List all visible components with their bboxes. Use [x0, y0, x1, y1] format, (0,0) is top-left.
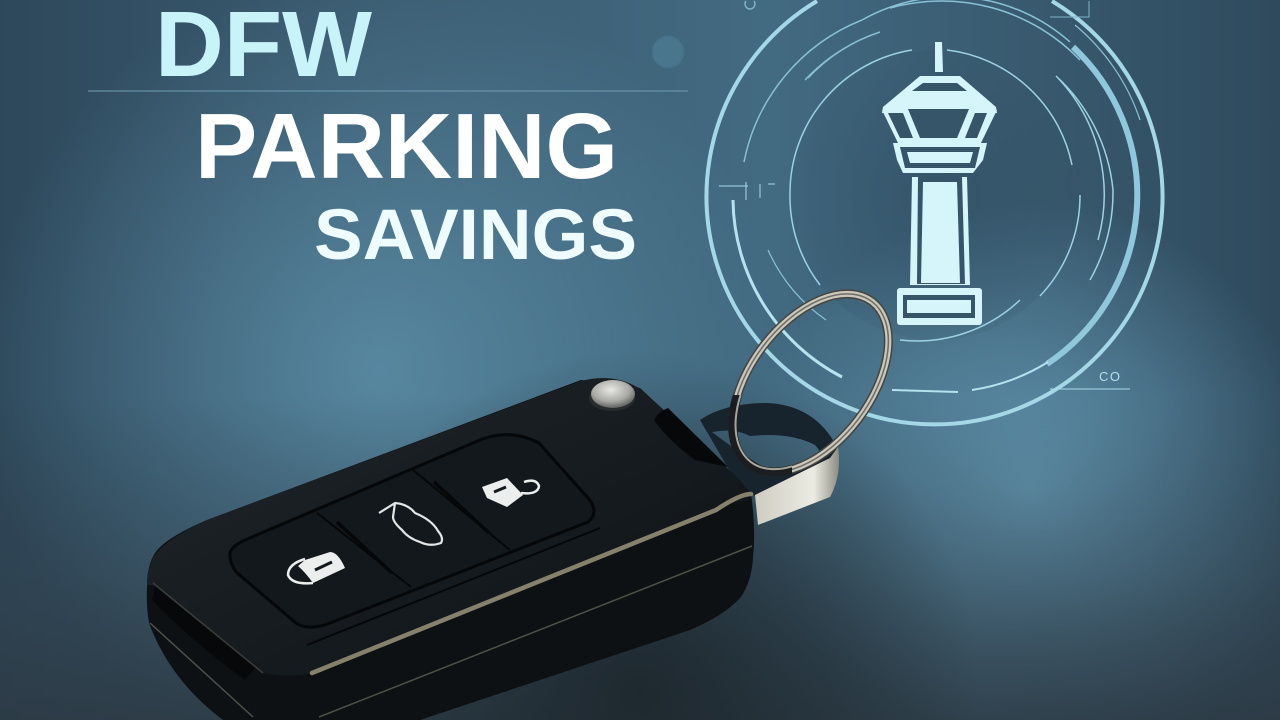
key ring: [728, 289, 893, 476]
icon: lock: [288, 552, 345, 583]
icon: control tower: [882, 42, 997, 325]
top surface: [147, 378, 748, 676]
title: PARKING: PARKING: [195, 94, 618, 198]
key fob body: [147, 378, 754, 720]
cab roof: [882, 76, 997, 113]
chrome pin: [589, 380, 635, 411]
upper right thin arc: [1075, 25, 1140, 120]
gallery: [893, 143, 987, 173]
button ridges: [337, 482, 489, 573]
middle ring right: [1056, 76, 1113, 280]
panel groove: [307, 528, 600, 645]
top-left small gauge: [745, 1, 755, 9]
inner dark disc: [790, 50, 1080, 340]
inner ring: [790, 50, 1080, 341]
cab body: [882, 110, 997, 145]
lower arcs: [892, 362, 1048, 392]
lower seam: [150, 546, 752, 717]
upper left arcs: [744, 20, 880, 162]
button panel: [230, 435, 594, 627]
icon: car trunk: [379, 503, 442, 545]
upper arc: [862, 0, 1080, 60]
base: [897, 288, 982, 325]
outer ring: [707, 1, 1162, 424]
title: SAVINGS: SAVINGS: [314, 196, 637, 275]
top-right bracket line: [1050, 1, 1089, 17]
antenna: [935, 42, 943, 72]
bottom-right label line: [1050, 388, 1130, 390]
key fob loop: [700, 403, 837, 500]
tick marks left: [719, 182, 775, 200]
button dividers: [317, 470, 510, 587]
label: CO: CO: [1099, 369, 1122, 384]
blade slot: [654, 408, 728, 467]
icon: unlock: [482, 478, 539, 507]
thick right arc: [1047, 47, 1137, 364]
shaft: [910, 177, 970, 285]
left slot edge: [153, 583, 263, 673]
lower left arc: [733, 200, 842, 377]
seam highlight: [312, 494, 751, 673]
middle ring left: [768, 250, 826, 320]
radar circle graphic: [707, 0, 1162, 424]
metal tab: [755, 447, 839, 525]
divider line under DFW: [88, 90, 688, 92]
lower body: [147, 380, 754, 720]
left slot: [152, 586, 255, 680]
